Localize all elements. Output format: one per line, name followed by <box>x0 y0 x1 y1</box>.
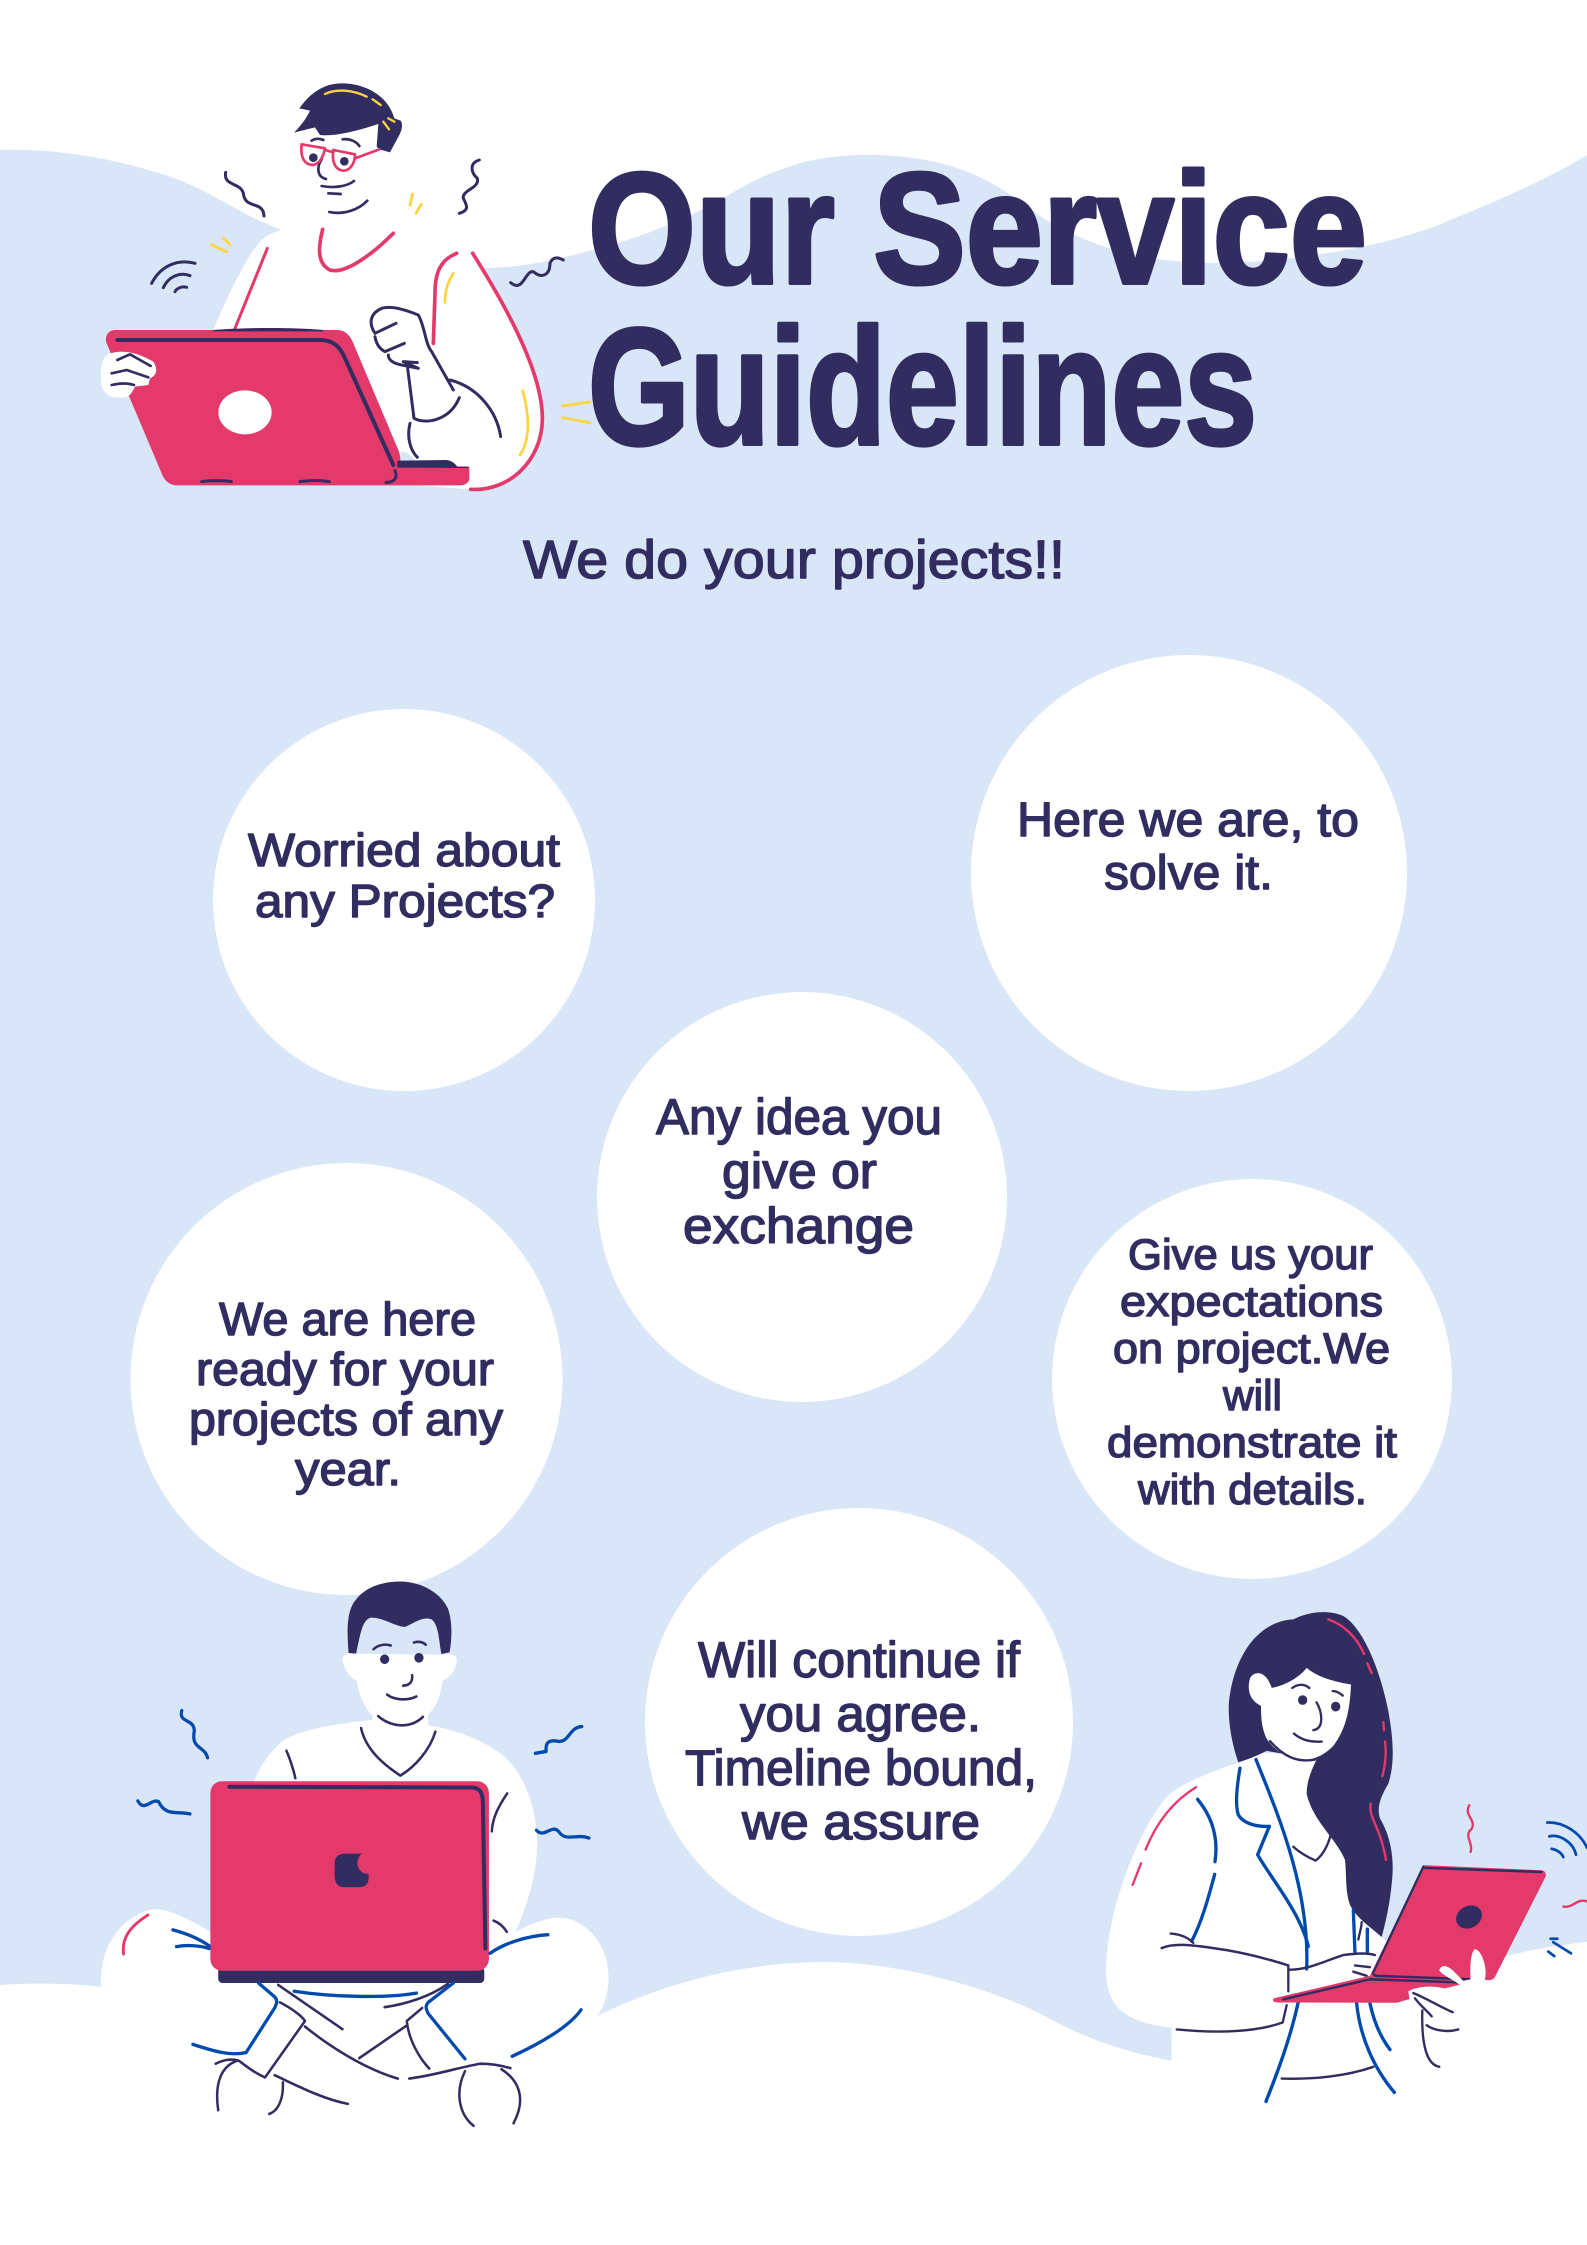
bubble: will continue if you agree: Timeline bound, <box>685 1740 1037 1796</box>
bubble: here we are: Here we are, to <box>1017 794 1359 847</box>
bubble: worried about projects: any Projects? <box>255 875 555 927</box>
bubble: worried about projects <box>213 709 595 1091</box>
bubble: give us your expectations: on project.We <box>1113 1325 1390 1373</box>
bubble: ready for your projects: We are here <box>219 1293 476 1345</box>
bubble: give us your expectations: with details. <box>1137 1466 1367 1514</box>
title: Guidelines <box>588 295 1257 480</box>
bubble: give us your expectations: expectations <box>1120 1278 1383 1326</box>
bubble: here we are <box>971 655 1407 1091</box>
bubble: give us your expectations: Give us your <box>1128 1231 1373 1279</box>
title <box>588 141 1367 480</box>
bubble: will continue if you agree: you agree. <box>740 1686 981 1742</box>
bubble: ready for your projects <box>130 1163 562 1595</box>
bubble: any idea: exchange <box>683 1198 914 1254</box>
bubble: ready for your projects: ready for your <box>196 1343 494 1395</box>
bubble: give us your expectations: demonstrate it <box>1107 1419 1397 1467</box>
bubble: worried about projects: Worried about <box>248 824 560 876</box>
bubble: any idea <box>597 992 1007 1402</box>
bubble: will continue if you agree <box>645 1508 1073 1936</box>
bubble: will continue if you agree: Will continue if <box>698 1632 1020 1688</box>
illustration: woman with laptop <box>1106 1612 1587 2109</box>
title: Our Service <box>588 141 1367 317</box>
bubble: ready for your projects: year. <box>295 1443 401 1495</box>
bubble: any idea: give or <box>722 1143 877 1199</box>
bubble: here we are: solve it. <box>1104 847 1273 900</box>
illustration: seated man with laptop <box>101 1582 609 2140</box>
bubble: any idea: Any idea you <box>656 1089 942 1145</box>
subtitle: We do your projects!! <box>523 530 1065 590</box>
bubble: ready for your projects: projects of any <box>189 1393 503 1445</box>
illustration: man with glasses and laptop <box>101 83 590 489</box>
bubble: give us your expectations: will <box>1222 1372 1282 1420</box>
bubble: give us your expectations <box>1052 1179 1452 1579</box>
bubble: will continue if you agree: we assure <box>741 1794 980 1850</box>
